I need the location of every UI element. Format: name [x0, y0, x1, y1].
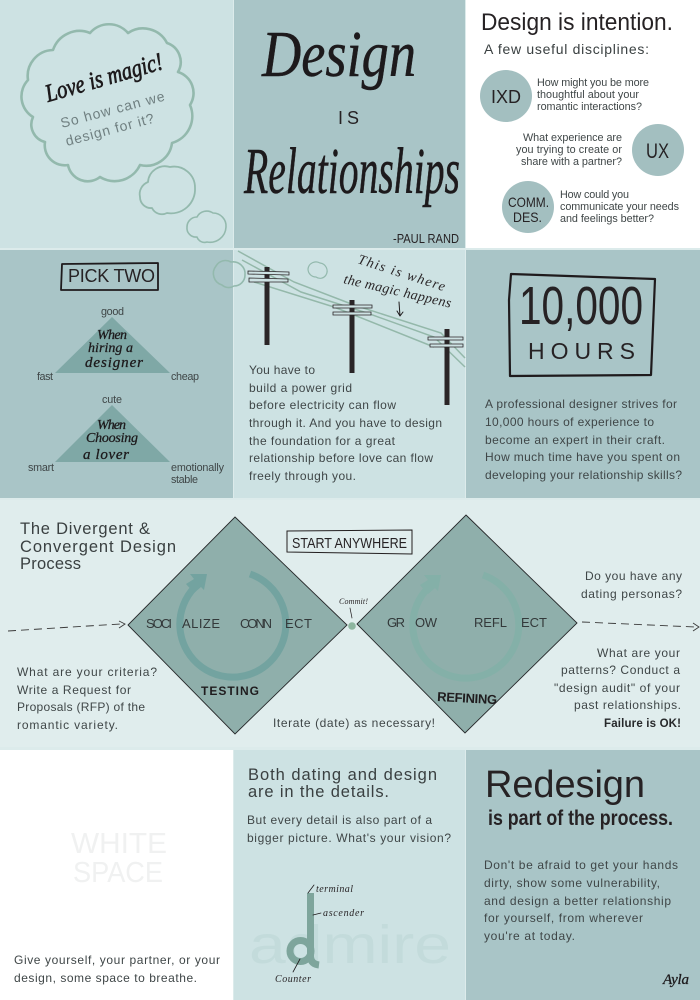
icon: pole one — [248, 267, 289, 345]
discipline: communication design: COMM. — [508, 194, 549, 210]
annotation: terminal: terminal — [316, 884, 353, 895]
heading: dating and design details: Both dating and design — [248, 766, 437, 784]
title: design is relationships: Relationships — [243, 135, 460, 208]
triangle: hiring a designer: fast — [37, 371, 53, 383]
triangle: choosing a lover: When — [97, 418, 126, 433]
text: iterate: Iterate (date) as necessary! — [273, 716, 435, 730]
word: admire: admire — [249, 915, 451, 975]
discipline: IXD — [480, 70, 649, 122]
icon: pole three — [428, 329, 463, 405]
title: design is relationships: Design — [261, 18, 416, 91]
discipline: communication design: DES. — [513, 209, 542, 225]
text: white space — [14, 953, 220, 985]
text: white space: design, some space to breathe. — [14, 971, 197, 985]
text: patterns: patterns? Conduct a — [561, 663, 680, 677]
text: power grid: You have to — [249, 363, 315, 377]
diamond: testing: ALIZE — [182, 616, 220, 631]
text: so how can we design for it: So how can we — [59, 88, 166, 131]
text: redesign: Don't be afraid to get your hands — [484, 858, 678, 872]
heading: dating and design details: are in the details. — [248, 783, 389, 801]
text: power grid: through it. And you have to design — [249, 416, 442, 430]
text: redesign: and design a better relationship — [484, 894, 671, 908]
text: power grid: build a power grid — [249, 381, 352, 395]
arrow: exiting dashed — [582, 622, 699, 631]
panel: redesign — [466, 750, 700, 1000]
icon: cloud small — [308, 262, 327, 278]
discipline: IXD: romantic interactions? — [537, 101, 642, 113]
text: personas — [581, 569, 682, 601]
text: power grid: the foundation for a great — [249, 434, 396, 448]
icon: power lines — [238, 251, 465, 367]
text: patterns: What are your — [597, 646, 680, 660]
annotation: ascender: ascender — [323, 908, 364, 919]
annotation: counter — [275, 959, 311, 985]
text: 10,000 hours: A professional designer strives for — [485, 397, 677, 411]
marker: commit — [339, 597, 368, 630]
discipline: communication design: and feelings better? — [560, 213, 654, 225]
icon: medium thought cloud — [140, 166, 195, 214]
text: bigger picture: But every detail is also part of a — [247, 813, 432, 827]
triangle: hiring a designer: When — [97, 328, 127, 343]
text: personas: Do you have any — [585, 569, 682, 583]
text: patterns — [554, 646, 681, 730]
discipline: UX: you trying to create or — [516, 144, 622, 156]
diamond: testing: SOCI — [146, 616, 172, 631]
triangle: choosing a lover — [28, 394, 225, 486]
heading: redesign — [485, 764, 673, 830]
diamond: refining: OW — [415, 615, 438, 630]
text: 10,000 hours — [485, 397, 682, 482]
icon: cycle arrow testing — [180, 574, 286, 677]
panel: 10,000 hours — [466, 250, 700, 498]
text: criteria: Write a Request for — [17, 683, 131, 697]
diamond: refining: GR — [387, 615, 405, 630]
heading: design is intention: Design is intention. — [481, 9, 673, 36]
title: design is relationships: IS — [338, 108, 359, 128]
text: so how can we design for it: design for it? — [64, 110, 156, 149]
arrow: entering dashed — [8, 621, 125, 631]
icon: cycle arrow refining — [413, 575, 519, 678]
heading: love is magic: Love is magic! — [41, 48, 166, 108]
text: bigger picture — [247, 813, 451, 845]
discipline: IXD: thoughtful about your — [537, 89, 639, 101]
text: criteria: What are your criteria? — [17, 665, 157, 679]
triangle: choosing a lover: stable — [171, 474, 198, 486]
diamond: testing: TESTING — [201, 684, 259, 698]
discipline: UX: What experience are — [523, 132, 622, 144]
triangle: hiring a designer: cheap — [171, 371, 199, 383]
triangle: hiring a designer: hiring a — [88, 341, 133, 356]
text: criteria: Proposals (RFP) of the — [17, 700, 145, 714]
heading: white space: WHITE — [71, 828, 167, 860]
diamond: refining — [357, 515, 577, 733]
triangle: hiring a designer — [37, 306, 199, 383]
heading: redesign: Redesign — [485, 764, 645, 806]
text: personas: dating personas? — [581, 587, 682, 601]
diamond: testing: ECT — [285, 616, 312, 631]
panel: details — [234, 750, 465, 1000]
triangle: hiring a designer: good — [101, 306, 124, 318]
text: patterns: Failure is OK! — [604, 718, 681, 730]
icon: pole two — [333, 300, 372, 373]
panel: pick two — [0, 250, 233, 498]
heading: divergent and convergent design process: The Divergent & — [20, 520, 150, 538]
text: 10,000 hours: become an expert in their craft. — [485, 433, 665, 447]
diamond: refining: REFL — [474, 615, 507, 630]
heading: dating and design details — [248, 766, 437, 801]
discipline: communication design — [502, 181, 680, 233]
text: bigger picture: bigger picture. What's your vision? — [247, 831, 451, 845]
discipline: IXD: How might you be more — [537, 77, 649, 89]
diamond: refining: ECT — [521, 615, 547, 630]
text: power grid: freely through you. — [249, 469, 356, 483]
callout box: start anywhere: START ANYWHERE — [292, 535, 407, 552]
panel: design is intention — [466, 0, 700, 248]
heading: divergent and convergent design process — [20, 520, 176, 573]
panel: white space — [0, 750, 233, 1000]
arrow: to wires — [397, 302, 403, 316]
diamond: refining: REFINING — [437, 689, 498, 707]
text: criteria: romantic variety. — [17, 718, 118, 732]
heading: white space — [71, 828, 167, 889]
icon: cloud left — [213, 261, 245, 288]
discipline: UX: share with a partner? — [521, 156, 622, 168]
diamond: testing — [128, 517, 347, 734]
text: 10,000 hours: 10,000 hours of experience to — [485, 415, 654, 429]
discipline: UX — [516, 124, 684, 176]
icon: small thought cloud — [187, 211, 226, 242]
discipline: UX: UX — [646, 140, 669, 163]
annotation: this is where the magic happens: the magic happens — [342, 272, 453, 312]
heading box: pick two: PICK TWO — [68, 266, 155, 286]
text: power grid: before electricity can flow — [249, 398, 396, 412]
diamond: testing: CONN — [240, 616, 272, 631]
text: redesign: for yourself, from wherever — [484, 911, 643, 925]
heading box: 10,000 hours: HOURS — [528, 338, 635, 364]
triangle: hiring a designer: designer — [85, 355, 143, 371]
text: 10,000 hours: developing your relationship skills? — [485, 468, 682, 482]
text: patterns: "design audit" of your — [554, 681, 680, 695]
attribution: paul rand: -PAUL RAND — [393, 231, 459, 246]
panel: love is magic — [0, 0, 233, 248]
heading: divergent and convergent design process: Convergent Design — [20, 538, 176, 556]
triangle: choosing a lover: a lover — [83, 447, 129, 463]
text: white space: Give yourself, your partner, or your — [14, 953, 220, 967]
annotation: counter: Counter — [275, 974, 311, 985]
discipline: IXD: IXD — [491, 87, 521, 107]
heading box: pick two — [61, 263, 158, 290]
annotation: this is where the magic happens: This is where — [356, 253, 447, 295]
triangle: choosing a lover: emotionally — [171, 462, 225, 474]
text: redesign — [484, 858, 678, 943]
icon: anatomy of the letter d — [290, 893, 319, 965]
annotation: this is where the magic happens — [342, 253, 453, 312]
subheading: a few useful disciplines: A few useful disciplines: — [484, 41, 649, 57]
text: redesign: dirty, show some vulnerability, — [484, 876, 660, 890]
signature: ayla: Ayla — [662, 972, 689, 988]
marker: commit: Commit! — [339, 597, 368, 606]
triangle: choosing a lover: Choosing — [86, 431, 138, 446]
heading: divergent and convergent design process: Process — [20, 555, 81, 573]
text: patterns: past relationships. — [574, 698, 681, 712]
triangle: choosing a lover: smart — [28, 462, 54, 474]
text: redesign: you're at today. — [484, 929, 575, 943]
heading box: 10,000 hours: 10,000 — [519, 276, 643, 336]
panel: power grid — [213, 250, 465, 498]
heading: redesign: is part of the process. — [488, 807, 673, 830]
heading box: 10,000 hours — [509, 274, 655, 376]
discipline: communication design: How could you — [560, 189, 629, 201]
panel: design is relationships — [234, 0, 465, 248]
text: criteria — [17, 665, 157, 732]
text: power grid: relationship before love can flow — [249, 451, 433, 465]
triangle: choosing a lover: cute — [102, 394, 122, 406]
icon: large thought cloud — [21, 24, 194, 181]
title: design is relationships — [243, 18, 460, 208]
text: power grid — [249, 363, 442, 483]
discipline: communication design: communicate your needs — [560, 201, 680, 213]
panel: divergent and convergent process — [0, 500, 700, 747]
text: 10,000 hours: How much time have you spent on — [485, 450, 680, 464]
callout box: start anywhere — [287, 530, 412, 554]
heading: white space: SPACE — [73, 857, 163, 889]
